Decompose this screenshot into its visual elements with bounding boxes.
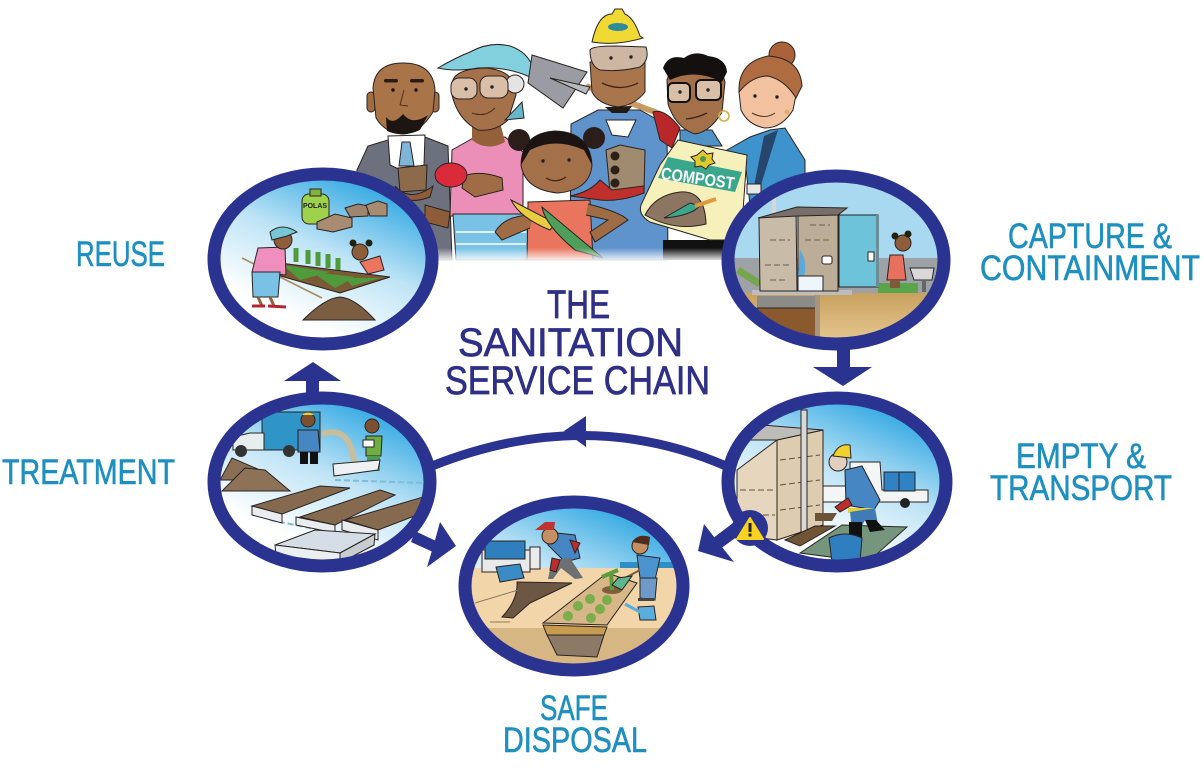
man with watering can bbox=[612, 536, 660, 620]
person: girl with corn bbox=[495, 127, 628, 260]
truck bbox=[823, 462, 928, 508]
underground soil bbox=[744, 293, 928, 338]
worker digging bbox=[815, 445, 885, 539]
label: safe disposal: DISPOSAL bbox=[503, 721, 647, 760]
drying beds bbox=[252, 486, 430, 540]
trench outlines bbox=[475, 590, 518, 622]
title bbox=[445, 283, 710, 403]
collecting tank bbox=[275, 530, 375, 563]
worker bbox=[298, 412, 320, 464]
icon: compost bag bbox=[640, 140, 747, 240]
dumped sludge bbox=[502, 582, 572, 618]
worker with spade bbox=[535, 522, 583, 579]
planted strip bbox=[543, 570, 637, 625]
panel: safe disposal bbox=[460, 502, 690, 678]
hose bbox=[322, 432, 354, 462]
brick in gloved hand bbox=[570, 145, 645, 200]
grandmother gardening bbox=[252, 227, 297, 307]
mat bbox=[800, 525, 907, 562]
label: safe disposal bbox=[503, 689, 647, 760]
person: young woman with glasses bbox=[663, 53, 729, 260]
dashed water lines bbox=[270, 480, 425, 530]
garden bed bbox=[277, 248, 390, 293]
label: empty and transport bbox=[990, 437, 1172, 508]
person: grandmother bbox=[435, 44, 533, 260]
arrow: capture to empty bbox=[813, 348, 872, 386]
icon: warning sign bbox=[732, 510, 768, 546]
title: THE bbox=[547, 283, 610, 327]
pit bbox=[756, 295, 820, 336]
supervisor with clipboard bbox=[363, 419, 382, 471]
title: SANITATION bbox=[458, 321, 683, 365]
truck bbox=[233, 412, 320, 457]
background wall bbox=[725, 258, 950, 293]
truck with barrels bbox=[482, 541, 540, 572]
compost piles bbox=[220, 458, 290, 491]
trench cross-section bbox=[543, 625, 607, 657]
inlet tank bbox=[333, 460, 380, 476]
panel: reuse bbox=[214, 174, 432, 344]
girl washing hands bbox=[887, 230, 934, 292]
label: empty and transport: TRANSPORT bbox=[990, 469, 1172, 508]
tipped barrel bbox=[496, 564, 524, 582]
apple bbox=[435, 163, 467, 187]
person: woman with hair bun bbox=[727, 42, 805, 205]
arrow: empty to treatment curved bbox=[432, 416, 726, 466]
person: man in suit bbox=[357, 63, 452, 260]
arrow: empty to safe disposal bbox=[698, 523, 738, 562]
girl gardening bbox=[350, 240, 384, 274]
arrow: treatment to reuse bbox=[284, 362, 341, 396]
label: capture and containment bbox=[980, 217, 1200, 288]
bucket bbox=[829, 534, 862, 562]
shovel bbox=[528, 55, 587, 108]
ground bbox=[472, 568, 676, 628]
bottom fade bbox=[430, 248, 730, 262]
icon: compost bag: COMPOST bbox=[660, 164, 736, 193]
label: reuse: REUSE bbox=[76, 235, 165, 274]
bricks bbox=[317, 201, 387, 232]
panel: empty and transport bbox=[728, 398, 946, 566]
wall with vent pipe bbox=[737, 410, 835, 546]
gas cylinder: POLAS bbox=[303, 203, 327, 210]
label: capture and containment: CAPTURE & bbox=[1008, 217, 1172, 256]
compost pile bbox=[303, 297, 375, 320]
person: worker with hard hat, goggles and shovel bbox=[528, 9, 680, 260]
arrow: treatment to safe disposal bbox=[411, 522, 456, 567]
label: safe disposal: SAFE bbox=[540, 689, 608, 728]
corn cob bbox=[511, 200, 555, 230]
rake bbox=[242, 258, 322, 298]
illustration: group of six community members bbox=[357, 9, 805, 262]
panel: capture and containment bbox=[725, 176, 950, 358]
title: SERVICE CHAIN bbox=[445, 359, 710, 403]
panel: treatment bbox=[214, 398, 430, 566]
gas cylinder bbox=[302, 189, 329, 224]
latrine bbox=[758, 207, 879, 291]
label: treatment: TREATMENT bbox=[2, 453, 175, 492]
label: empty and transport: EMPTY & bbox=[1016, 437, 1146, 476]
